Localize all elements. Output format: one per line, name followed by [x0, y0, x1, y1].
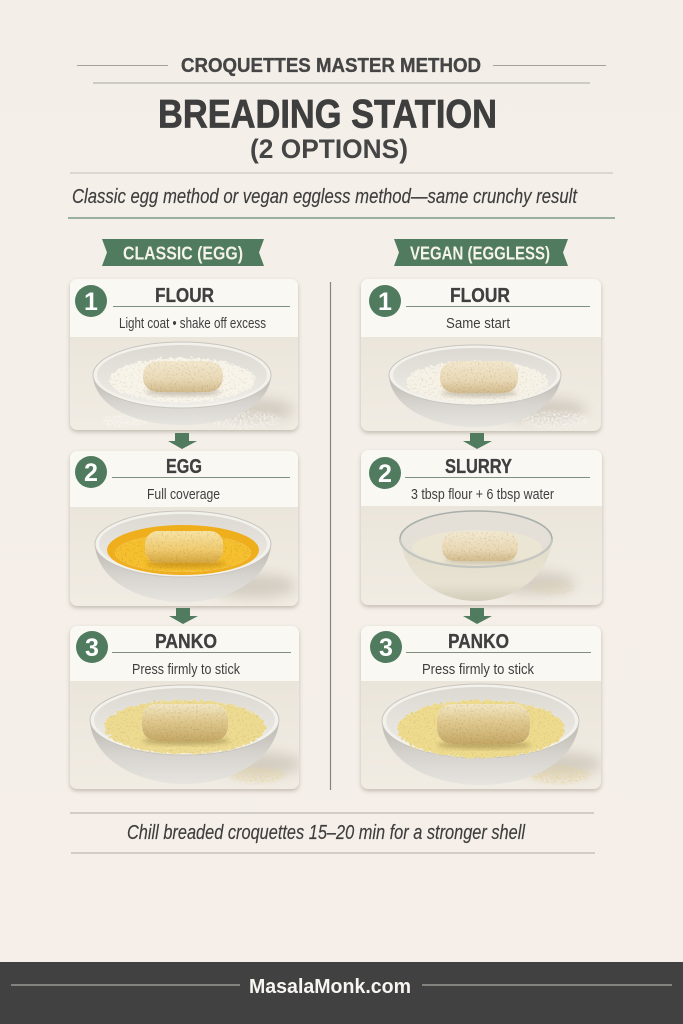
step note: Press firmly to stick	[422, 662, 535, 678]
step note: Full coverage	[147, 487, 220, 503]
footer bar: MasalaMonk.com	[249, 976, 411, 998]
photo: croquette in flour bowl	[389, 345, 589, 429]
ribbon: classic egg: CLASSIC (EGG)	[123, 244, 243, 264]
panel: classic step 3 panko	[70, 626, 302, 791]
ribbon: classic egg	[102, 239, 264, 266]
eyebrow heading with rules: CROQUETTES MASTER METHOD	[181, 55, 481, 77]
title: BREADING STATION	[158, 92, 497, 136]
number badge 3: 3	[379, 634, 393, 662]
step heading: flour: FLOUR	[450, 285, 510, 307]
photo: croquette in panko bowl	[90, 685, 302, 784]
footer bar	[0, 962, 683, 1024]
panel: vegan step 1 flour	[361, 279, 601, 433]
callout: chill tip: Chill breaded croquettes 15–20 min for a stronger shell	[127, 822, 525, 844]
panel: vegan step 3 panko	[361, 626, 602, 791]
step heading: slurry: SLURRY	[445, 456, 513, 478]
step note: Press firmly to stick	[132, 662, 241, 678]
step note: 3 tbsp flour + 6 tbsp water	[411, 487, 554, 503]
step heading: panko: PANKO	[448, 631, 509, 653]
panel: vegan step 2 slurry	[361, 450, 602, 607]
photo: croquette in flour bowl	[93, 342, 294, 429]
title	[158, 92, 497, 164]
subtitle with rules: Classic egg method or vegan eggless method—same crunchy result	[72, 186, 578, 208]
step heading: panko: PANKO	[155, 631, 217, 653]
title: (2 OPTIONS)	[250, 134, 408, 164]
number badge 3: 3	[85, 634, 99, 662]
arrow: vegan 2 to 3	[463, 608, 492, 624]
ribbon: vegan eggless	[394, 239, 568, 266]
number badge 2	[369, 457, 401, 489]
number badge 3	[370, 631, 402, 663]
step heading: egg: EGG	[166, 456, 202, 478]
number badge 2: 2	[378, 460, 392, 488]
panel: classic step 1 flour	[70, 279, 298, 432]
number badge 1	[75, 285, 107, 317]
arrow: vegan 1 to 2	[463, 433, 492, 449]
step heading: flour: FLOUR	[155, 285, 214, 307]
number badge 2	[75, 456, 107, 488]
number badge 1: 1	[84, 288, 98, 316]
step note: Same start	[446, 316, 510, 332]
ribbon: vegan eggless: VEGAN (EGGLESS)	[410, 244, 550, 264]
number badge 1: 1	[378, 288, 392, 316]
photo: croquette in panko bowl	[382, 684, 602, 785]
arrow: classic 1 to 2	[168, 433, 197, 449]
arrow: classic 2 to 3	[169, 608, 198, 624]
photo: croquette in beaten egg bowl	[95, 511, 296, 602]
number badge 3	[76, 631, 108, 663]
column divider	[330, 282, 332, 790]
number badge 1	[369, 285, 401, 317]
panel: classic step 2 egg	[70, 451, 298, 608]
photo: croquette in glass bowl of slurry	[400, 511, 575, 601]
step note: Light coat • shake off excess	[119, 316, 266, 332]
number badge 2: 2	[84, 459, 98, 487]
